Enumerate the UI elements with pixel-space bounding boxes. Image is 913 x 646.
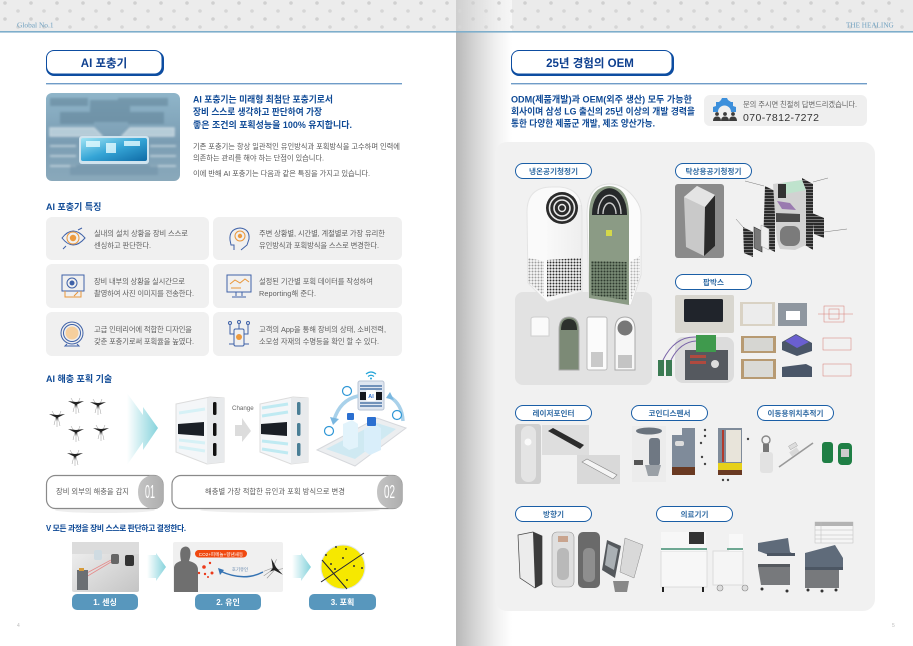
card: 고급 디자인 [46, 312, 209, 356]
photo: lure [173, 542, 286, 592]
product: pop box [658, 295, 853, 383]
step label: 3. 포획: 3. 포획 [331, 597, 354, 607]
card: 설치 상황 센싱: 센싱하고 판단한다. [94, 241, 151, 250]
card: App [213, 312, 402, 356]
card: 사진 전송: 장비 내부의 상황을 실시간으로 [94, 277, 185, 286]
header band right: THE HEALING [846, 22, 894, 30]
step 01 pill: 장비 외부의 해충을 감지 [56, 487, 129, 496]
arrow 2 [292, 553, 311, 581]
smart phone illustration: AI [368, 394, 374, 400]
intro body text: 의존하는 관리를 해야 하는 단점이 있습니다. [193, 154, 324, 162]
pill: 코인디스펜서: 코인디스펜서 [649, 408, 690, 418]
card: 사진 전송: 촬영하여 사진 이미지를 전송한다. [94, 289, 194, 298]
product: air purifiers [515, 184, 652, 385]
product: desk purifier [675, 184, 724, 258]
change arrow: Change [232, 405, 254, 412]
OEM intro text: 회사이며 삼성 LG 출신의 25년 이상의 개발 경력을 [511, 106, 695, 116]
step 01 pill: 01 [145, 482, 155, 502]
step label: 1. 센싱 [72, 594, 138, 610]
contact box: 문의 주시면 친절히 답변드리겠습니다. [743, 100, 857, 109]
title: 25년 경험의 OEM: 25년 경험의 OEM [546, 56, 634, 70]
product: laser pointer [515, 424, 620, 484]
card: 유인방식 변경 [213, 217, 402, 260]
intro heading text: 좋은 조건의 포획성능을 100% 유지합니다. [193, 119, 352, 130]
card: App: 소모성 자재의 수명등을 확인 할 수 있다. [259, 337, 379, 346]
photo: lure: CO2+피메놀+향냄새등 [199, 551, 243, 558]
heading: AI 포충기 특징: AI 포충기 특징 [46, 201, 101, 212]
pill: 방향기: 방향기 [543, 509, 564, 519]
contact box: 070-7812-7272 [743, 112, 819, 124]
card: App: 고객의 App을 통해 장비의 상태, 소비전력, [259, 325, 386, 334]
step label: 3. 포획 [309, 594, 376, 610]
intro heading text: 장비 스스로 생각하고 판단하여 가장 [193, 106, 322, 117]
device after [260, 397, 308, 464]
contact box [704, 95, 867, 126]
card: Reporting [213, 264, 402, 308]
product: medical devices [661, 522, 853, 592]
pill: 이동용위치추적기 [758, 406, 834, 420]
OEM intro text: ODM(제품개발)과 OEM(외주 생산) 모두 가능한 [511, 94, 693, 104]
step 02 pill: 02 [384, 482, 395, 502]
sub heading: V 모든 과정을 장비 스스로 판단하고 결정한다. [46, 523, 186, 533]
panel: products [495, 142, 875, 611]
step 02 pill: 해충별 가장 적합한 유인과 포획 방식으로 변경 [205, 487, 345, 496]
pill: 의료기기 [656, 506, 732, 522]
header band left: Global No.1 [17, 20, 54, 30]
card: 설치 상황 센싱: 실내의 설치 상황을 장비 스스로 [94, 229, 188, 238]
device before [176, 397, 224, 464]
pill: 탁상용공기청정기 [676, 164, 752, 178]
pill: 레이저포인터: 레이저포인터 [533, 408, 574, 418]
page number right: 5 [892, 623, 895, 629]
photo: sensing [72, 542, 139, 592]
intro body text [193, 142, 400, 178]
step label: 1. 센싱: 1. 센싱 [93, 597, 117, 607]
pill: 의료기기: 의료기기 [681, 509, 708, 519]
arrow 1 [147, 553, 166, 581]
pill: 레이저포인터 [516, 406, 592, 420]
title: AI 포충기 [46, 50, 164, 76]
product: tracker [760, 436, 852, 473]
header band right [456, 0, 913, 33]
pill: 코인디스펜서 [632, 406, 708, 420]
pill: 냉온공기청정기: 냉온공기청정기 [529, 166, 578, 176]
intro body text: 기존 포충기는 항상 일관적인 유인방식과 포획방식을 고수하며 인력에 [193, 142, 400, 151]
title: AI 포충기: AI 포충기 [81, 56, 127, 70]
intro heading text [193, 94, 352, 130]
step 01 pill [46, 476, 163, 513]
card: 사진 전송 [46, 264, 209, 308]
OEM intro text [511, 94, 695, 128]
step 02 pill [172, 476, 402, 513]
photo: lure: 호기유인 [232, 566, 248, 573]
feature cards [46, 217, 402, 356]
icon: gear and people [713, 98, 737, 121]
title: 25년 경험의 OEM [511, 50, 674, 76]
step label: 2. 유인 [195, 594, 261, 610]
pill: 팝박스: 팝박스 [703, 277, 724, 287]
card: 고급 디자인: 고급 인테리어에 적합한 디자인을 [94, 325, 192, 334]
heading: AI 해충 포획 기술: AI 해충 포획 기술 [46, 373, 112, 384]
pill: 이동용위치추적기: 이동용위치추적기 [768, 408, 823, 418]
product: coin dispenser [632, 426, 749, 482]
pill: 방향기 [516, 506, 592, 522]
card: 고급 디자인: 갖춘 포충기로써 포획율을 높였다. [94, 337, 194, 346]
card: 유인방식 변경: 유인방식과 포획방식을 스스로 변경한다. [259, 241, 379, 250]
photo: AI chip phone [46, 93, 180, 181]
intro heading text: AI 포충기는 미래형 최첨단 포충기로서 [193, 94, 333, 104]
photo: trap [321, 545, 365, 589]
page number left: 4 [17, 623, 20, 629]
step label: 2. 유인: 2. 유인 [216, 597, 240, 607]
card: 유인방식 변경: 주변 상황별, 시간별, 계절별로 가장 유리한 [259, 229, 385, 238]
product: exploded view [736, 178, 847, 257]
card: 설치 상황 센싱 [46, 217, 209, 260]
pill: 팝박스 [676, 274, 752, 290]
big arrow [127, 393, 158, 465]
smart phone illustration [317, 372, 406, 466]
card: Reporting: 설정된 기간별 포획 데이터를 작성하여 [259, 277, 373, 286]
intro body text: 이에 반해 AI 포충기는 다음과 같은 특징을 가지고 있습니다. [193, 169, 370, 178]
OEM intro text: 통한 다양한 제품군 개발, 제조 양산가능. [511, 118, 655, 128]
header band left [0, 0, 456, 33]
change arrow [232, 405, 254, 442]
pill: 냉온공기청정기 [516, 164, 592, 178]
card: Reporting: Reporting해 준다. [259, 289, 316, 298]
product: diffuser [518, 532, 643, 592]
pill: 탁상용공기청정기: 탁상용공기청정기 [686, 166, 741, 176]
mosquitoes [49, 398, 109, 466]
